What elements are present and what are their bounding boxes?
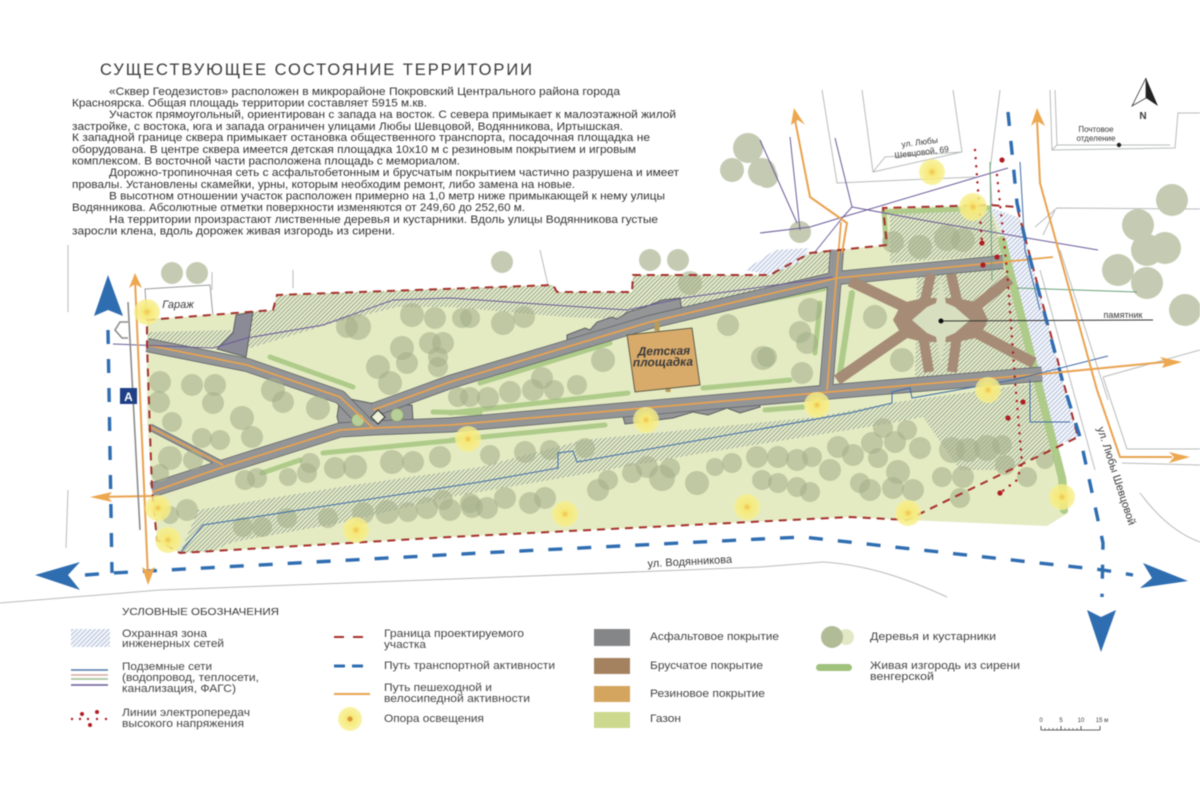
description text block: Красноярска. Общая площадь территории составляет 5915 м.кв. — [72, 98, 427, 110]
legend: underground networks — [71, 661, 259, 695]
description text block: На территории произрастают лиственные деревья и кустарники. Вдоль улицы Водянникова густые — [109, 214, 658, 226]
north arrow — [1132, 78, 1158, 122]
bus stop curb — [115, 302, 140, 530]
legend heading: УСЛОВНЫЕ ОБОЗНАЧЕНИЯ — [122, 606, 279, 618]
description text block: В высотном отношении участок расположен примерно на 1,0 метр ниже примыкающей к нему улицы — [109, 190, 665, 202]
legend: light pole — [338, 707, 484, 731]
description text block: провалы. Установлены скамейки, урны, которым необходим ремонт, либо замена на новые. — [72, 179, 575, 191]
map labels: Почтовое — [1078, 125, 1114, 134]
legend: site boundary: Граница проектируемого — [384, 628, 524, 640]
legend: underground networks: канализация, ФАГС) — [122, 683, 236, 695]
orange arrowheads — [90, 108, 1190, 585]
legend: light pole: Опора освещения — [384, 713, 484, 725]
scale bar: 0 — [1039, 718, 1043, 724]
legend: power lines: высокого напряжения — [122, 718, 244, 730]
trees and shrubs inside the park — [148, 225, 1054, 537]
playground — [627, 322, 700, 392]
boundary of the designed area — [147, 205, 1078, 553]
transport activity routes: blue dashed — [85, 112, 1133, 597]
playground: Детская — [637, 344, 690, 358]
title: СУЩЕСТВУЮЩЕЕ СОСТОЯНИЕ ТЕРРИТОРИИ — [100, 61, 532, 79]
legend: hedge: венгерской — [870, 671, 934, 683]
paved star plaza with memorial — [837, 274, 1034, 380]
legend: underground networks: (водопровод, теплосети, — [122, 672, 259, 684]
legend — [71, 606, 1020, 731]
legend: pedestrian route: Путь пешеходной и — [384, 682, 492, 694]
legend: power lines — [71, 707, 250, 730]
pedestrian activity routes: orange — [96, 120, 1172, 578]
surrounding streets and buildings — [0, 90, 1200, 603]
map labels — [647, 125, 1143, 570]
pedestrian and cycling paths on roads — [147, 222, 1053, 492]
legend: pedestrian route: велосипедной активности — [384, 693, 530, 705]
legend: pedestrian route — [334, 682, 530, 705]
memorial star centre — [912, 277, 970, 365]
description text block: оборудована. В центре сквера имеется детская площадка 10х10 м с резиновым покрытием и игровым — [72, 144, 636, 156]
legend: site boundary — [334, 628, 524, 651]
scale bar: 10 — [1078, 718, 1085, 724]
lawn: park ground — [147, 205, 1068, 553]
legend: engineering zone — [71, 628, 224, 650]
description text block: комплексом. В восточной части расположена площадь с мемориалом. — [72, 156, 460, 168]
garage drive — [217, 312, 253, 357]
scale bar — [1039, 718, 1108, 730]
blue arrowheads — [35, 275, 1188, 652]
map labels: Шевцовой, 69 — [894, 144, 950, 160]
legend: paving: Брусчатое покрытие — [650, 660, 763, 672]
legend: engineering zone: Охранная зона — [122, 628, 208, 640]
legend: lawn: Газон — [650, 713, 681, 725]
description text block: заросли клена, вдоль дорожек живая изгородь из сирени. — [72, 226, 395, 238]
bus stop sign — [120, 388, 137, 404]
lighting poles — [134, 159, 1075, 553]
legend: trees: Деревья и кустарники — [870, 631, 996, 643]
legend: rubber — [594, 686, 765, 702]
playground: площадка — [633, 354, 693, 370]
description text block: «Сквер Геодезистов» расположен в микрорайоне Покровский Центрального района города — [109, 86, 621, 98]
description text block: Дорожно-тропиночная сеть с асфальтобетонным и брусчатым покрытием частично разрушена и имеет — [109, 167, 679, 179]
asphalt road network — [147, 250, 1042, 490]
legend: hedge — [816, 660, 1020, 683]
garage building — [145, 285, 213, 320]
map labels: ул. Водянникова — [647, 554, 733, 570]
high voltage power lines — [975, 150, 1026, 496]
legend: asphalt — [594, 629, 779, 646]
trees outside the park — [161, 133, 1200, 326]
map labels: ул. Любы — [901, 135, 938, 149]
bus stop sign: A — [124, 390, 133, 404]
description text block: К западной границе сквера примыкает остановка общественного транспорта, посадочная площадка не — [72, 132, 650, 144]
hedges: living fence of lilac — [262, 208, 1064, 510]
legend: paving — [594, 658, 763, 674]
legend: engineering zone: инженерных сетей — [122, 638, 224, 650]
legend: hedge: Живая изгородь из сирени — [870, 660, 1020, 672]
protection zones: hatched engineering networks — [148, 207, 1078, 553]
north arrow: N — [1139, 111, 1147, 122]
legend: power lines: Линии электропередач — [122, 707, 250, 719]
description text block: Водянникова. Абсолютные отметки поверхности изменяются от 249,60 до 252,60 м. — [72, 202, 525, 214]
description text block: Участок прямоугольный, ориентирован с запада на восток. С севера примыкает к малоэтажной жилой — [109, 109, 676, 121]
description text block — [72, 86, 679, 238]
underground networks: purple, blue and green lines — [113, 137, 1153, 553]
legend: trees — [821, 626, 996, 648]
legend: rubber: Резиновое покрытие — [650, 688, 765, 700]
scale bar: 15 м — [1096, 718, 1108, 724]
legend: site boundary: участка — [384, 639, 427, 651]
map labels: отделение — [1077, 134, 1116, 143]
roundabout planters — [352, 408, 404, 426]
legend: transport route: Путь транспортной активности — [384, 660, 555, 672]
legend: underground networks: Подземные сети — [122, 661, 212, 673]
scale bar: 5 — [1059, 718, 1063, 724]
map labels: ул. Любы Шевцовой — [1094, 425, 1137, 527]
description text block: застройке, с востока, юга и запада ограничен улицами Любы Шевцовой, Водянникова, Иртышская. — [72, 121, 623, 133]
legend: lawn — [594, 712, 681, 728]
garage building: Гараж — [162, 299, 194, 311]
map labels: памятник — [1104, 310, 1143, 320]
legend: asphalt: Асфальтовое покрытие — [650, 631, 779, 643]
